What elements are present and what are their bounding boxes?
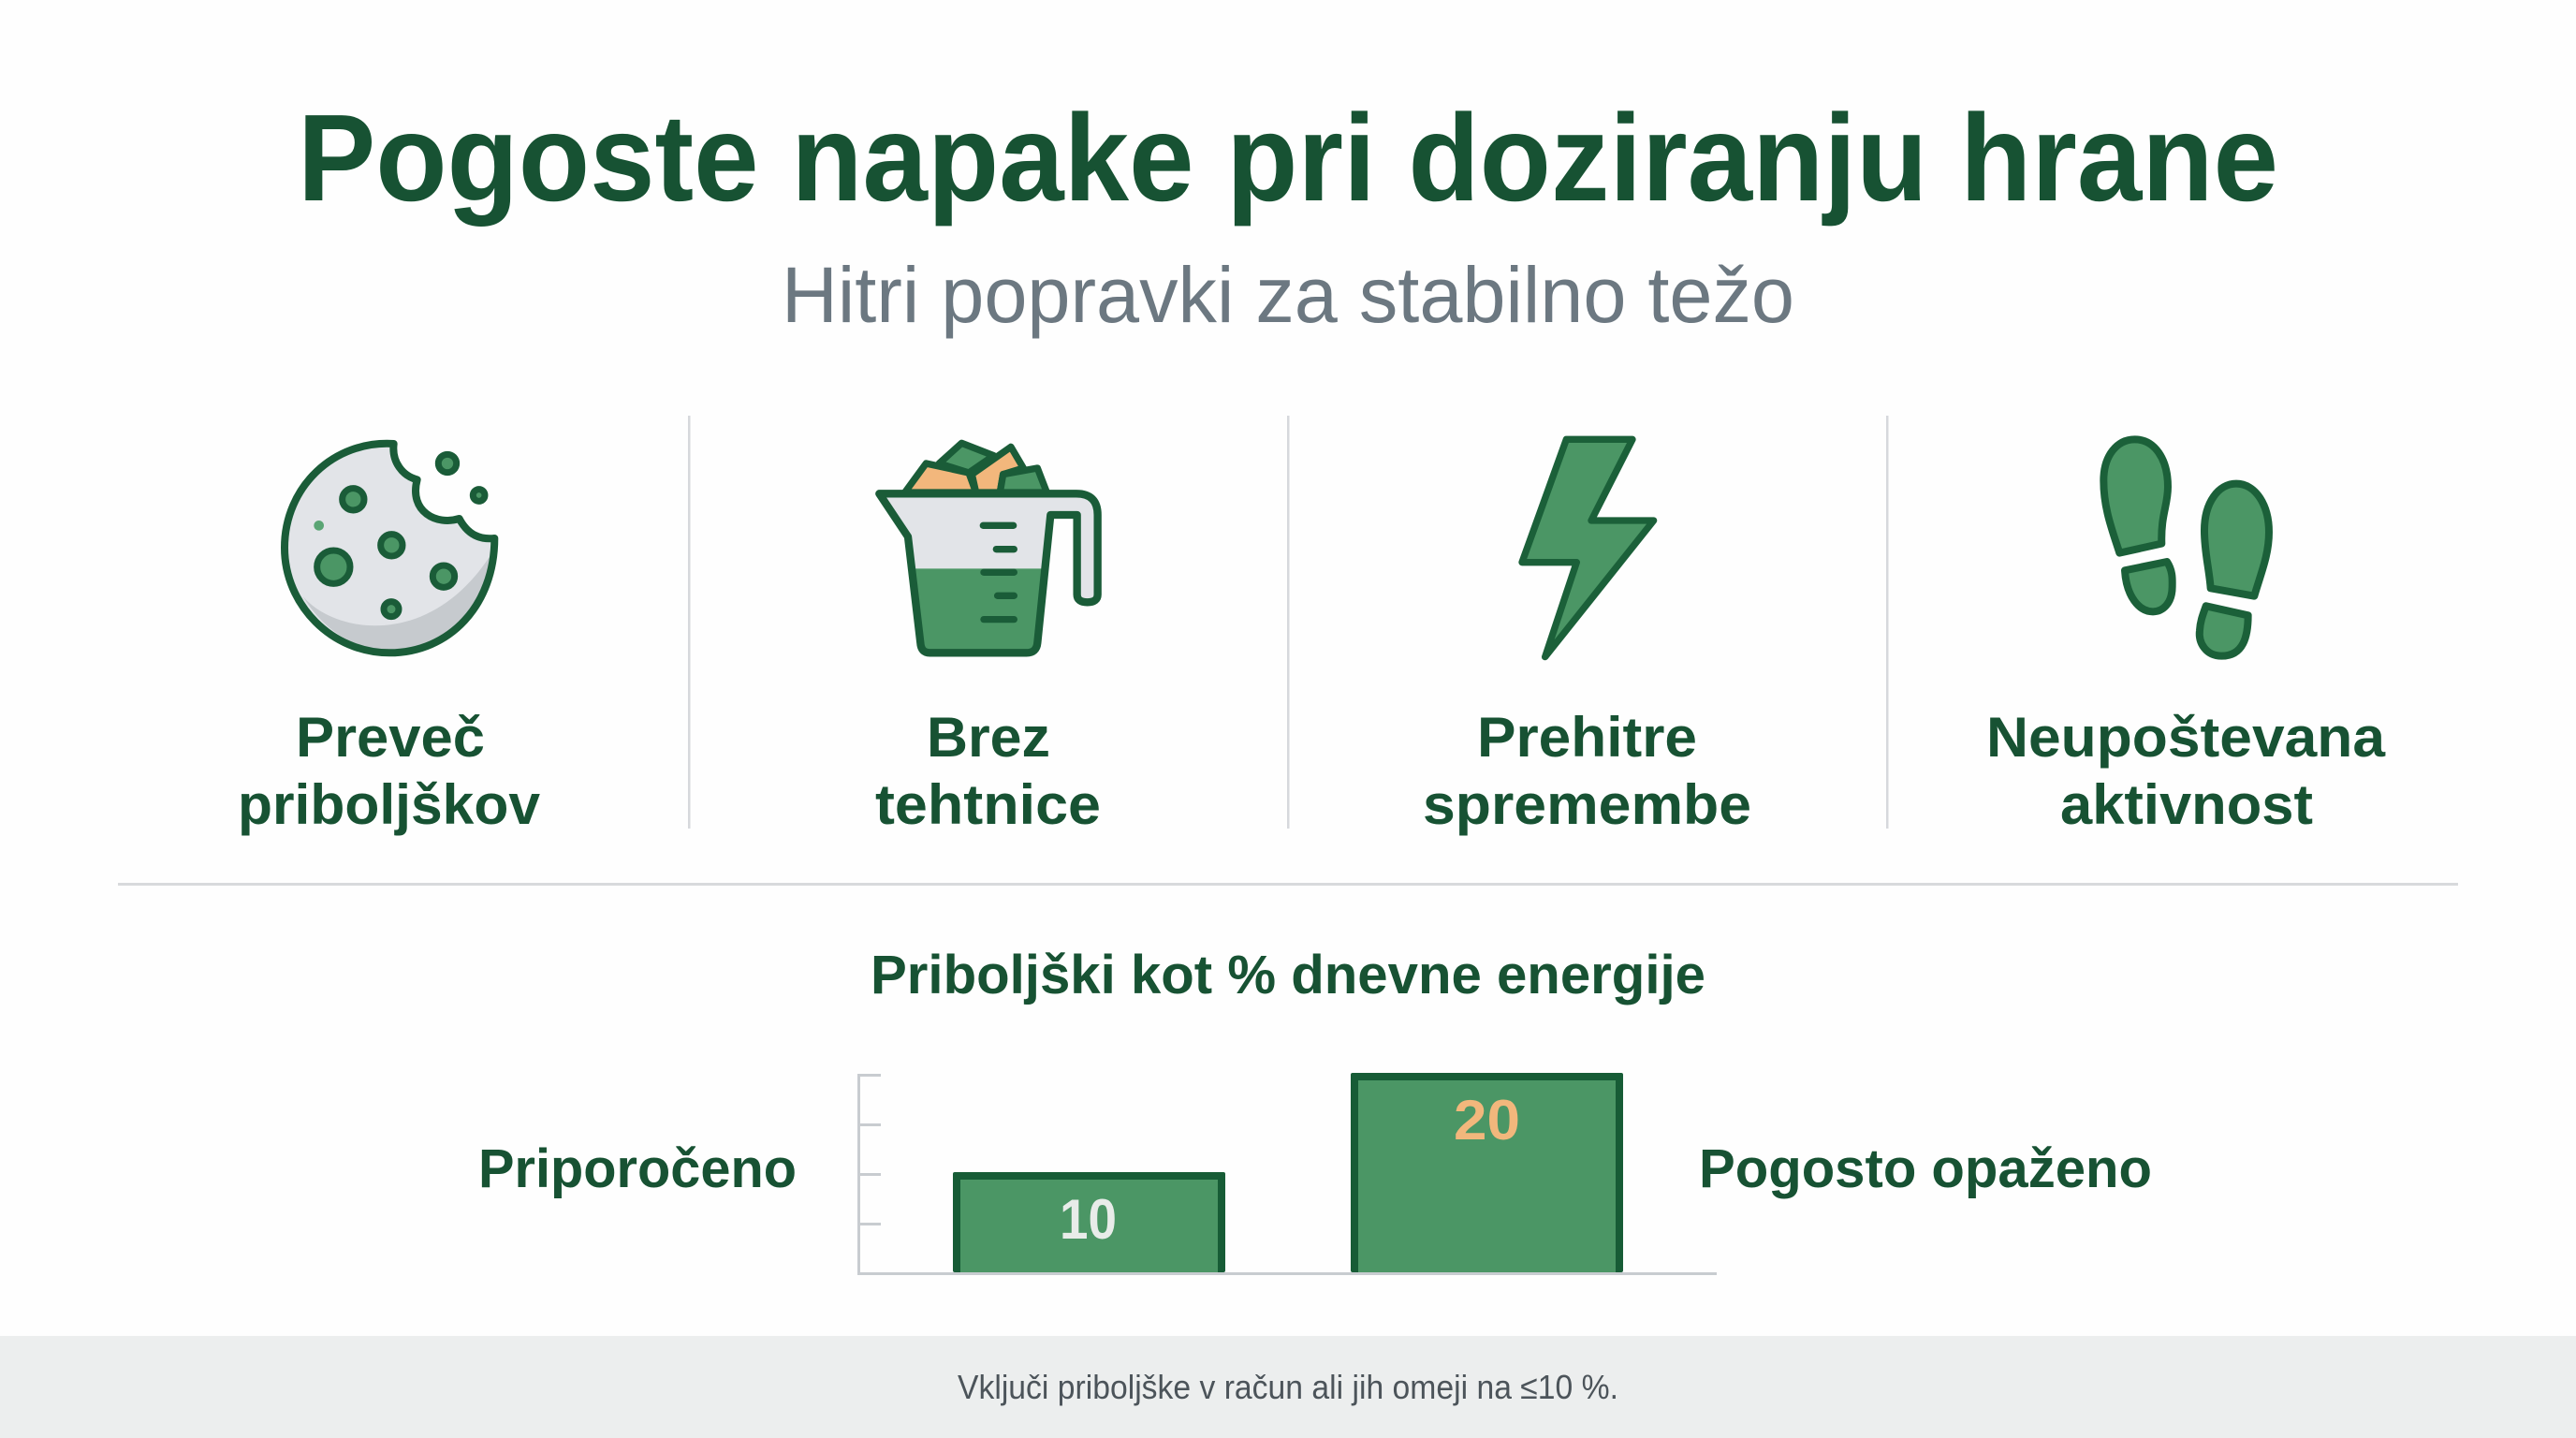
label: Prehitre spremembe: spremembe bbox=[1423, 773, 1751, 836]
bar: 10 bbox=[953, 1172, 1225, 1272]
title: Pogoste napake pri doziranju hrane bbox=[298, 89, 2278, 227]
icon: cookie with bite bbox=[285, 444, 494, 653]
icon: lightning bolt bbox=[1522, 439, 1654, 657]
label: Neupoštevana aktivnost: aktivnost bbox=[2060, 773, 2313, 836]
label: Priporočeno: Priporočeno bbox=[478, 1138, 797, 1199]
label: Neupoštevana aktivnost bbox=[1986, 706, 2386, 836]
bar chart bbox=[857, 1073, 1717, 1275]
label: Pogosto opaženo: Pogosto opaženo bbox=[1699, 1138, 2152, 1199]
label: Prehitre spremembe: Prehitre bbox=[1477, 706, 1697, 769]
bar: 20 bbox=[1351, 1073, 1623, 1272]
label: Preveč priboljškov bbox=[238, 706, 541, 836]
label: Prehitre spremembe bbox=[1423, 706, 1751, 836]
icon: measuring jug with food bbox=[879, 443, 1098, 653]
chart title: Priboljški kot % dnevne energije bbox=[871, 945, 1705, 1005]
label: Preveč priboljškov: priboljškov bbox=[238, 773, 541, 836]
bar: 20: 20 bbox=[1454, 1089, 1520, 1152]
label: Preveč priboljškov: Preveč bbox=[296, 706, 485, 769]
footer band: Vključi priboljške v račun ali jih omeji na ≤10 %. bbox=[958, 1368, 1618, 1406]
bar: 10: 10 bbox=[1060, 1188, 1117, 1251]
icon: footprints bbox=[2103, 439, 2269, 656]
label: Brez tehtnice: Brez bbox=[927, 706, 1050, 769]
label: Neupoštevana aktivnost: Neupoštevana bbox=[1986, 706, 2386, 769]
label: Brez tehtnice: tehtnice bbox=[875, 773, 1101, 836]
subtitle: Hitri popravki za stabilno težo bbox=[782, 251, 1794, 339]
footer band bbox=[0, 1336, 2576, 1438]
label: Brez tehtnice bbox=[875, 706, 1101, 836]
